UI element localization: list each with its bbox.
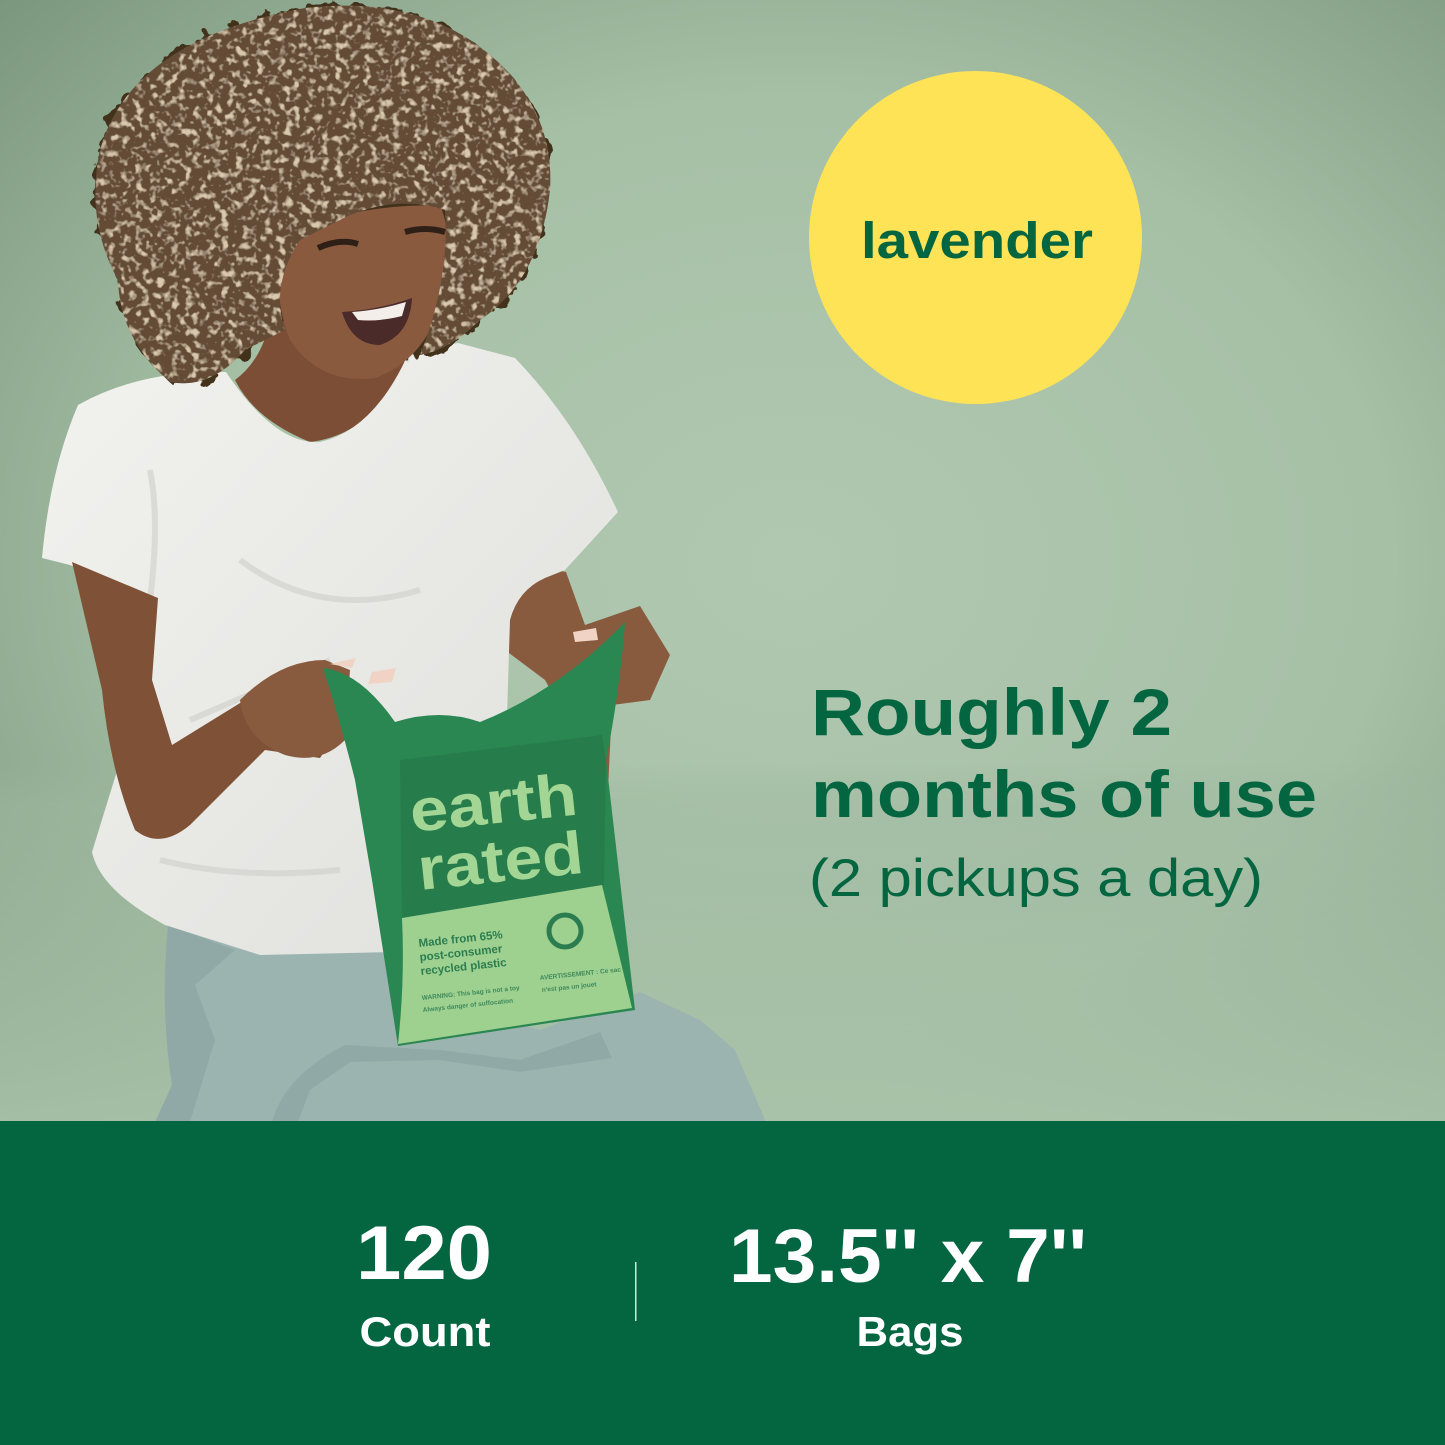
bag seal [549, 915, 581, 947]
bag label text: Made from 65% [418, 929, 503, 950]
t-shirt [42, 343, 618, 955]
bag label text: recycled plastic [420, 957, 508, 978]
stat: bag size [729, 1214, 1087, 1355]
footer band [0, 1121, 1445, 1445]
bag brand [406, 761, 586, 903]
usage text [809, 675, 1317, 908]
bag label text: post-consumer [419, 943, 503, 964]
bag warning text: Always danger of suffocation [422, 998, 513, 1014]
face [279, 205, 448, 379]
badge: lavender [809, 71, 1142, 404]
jeans [155, 925, 766, 1122]
bag warning text: n'est pas un jouet [541, 981, 598, 994]
badge: lavender: lavender [861, 212, 1093, 269]
stat: 120 count: Count [360, 1308, 490, 1355]
stat: 120 count [356, 1211, 492, 1355]
bag warning text: AVERTISSEMENT : Ce sac [539, 966, 622, 982]
divider [635, 1262, 636, 1321]
stat: bag size: 13.5'' x 7'' [729, 1214, 1087, 1299]
nails [330, 628, 598, 684]
photo: woman holding bag [42, 6, 766, 1122]
shirt folds [150, 470, 420, 873]
eyes and brows [318, 229, 445, 248]
bag brand: rated [414, 819, 586, 903]
usage text: Roughly 2 [811, 675, 1172, 749]
mouth [342, 298, 412, 345]
left arm [72, 562, 345, 839]
bag warning text [421, 966, 622, 1014]
hair front [95, 6, 550, 383]
left hand [240, 660, 350, 758]
bag label panel [398, 885, 632, 1044]
bag warning text: WARNING: This bag is not a toy [421, 985, 520, 1002]
background [0, 0, 1445, 1125]
teeth [352, 302, 406, 320]
hair back [95, 6, 550, 383]
jeans shading [155, 925, 612, 1122]
stat: bag size: Bags [856, 1308, 964, 1355]
usage text: months of use [811, 757, 1317, 831]
bag label text [418, 929, 508, 978]
bag darker front panel [400, 735, 606, 918]
bag brand: earth [406, 761, 580, 845]
stat: 120 count: 120 [356, 1211, 492, 1296]
usage text: (2 pickups a day) [809, 849, 1263, 908]
bag [323, 622, 635, 1046]
right arm [505, 571, 670, 790]
neck and chest [235, 320, 405, 442]
